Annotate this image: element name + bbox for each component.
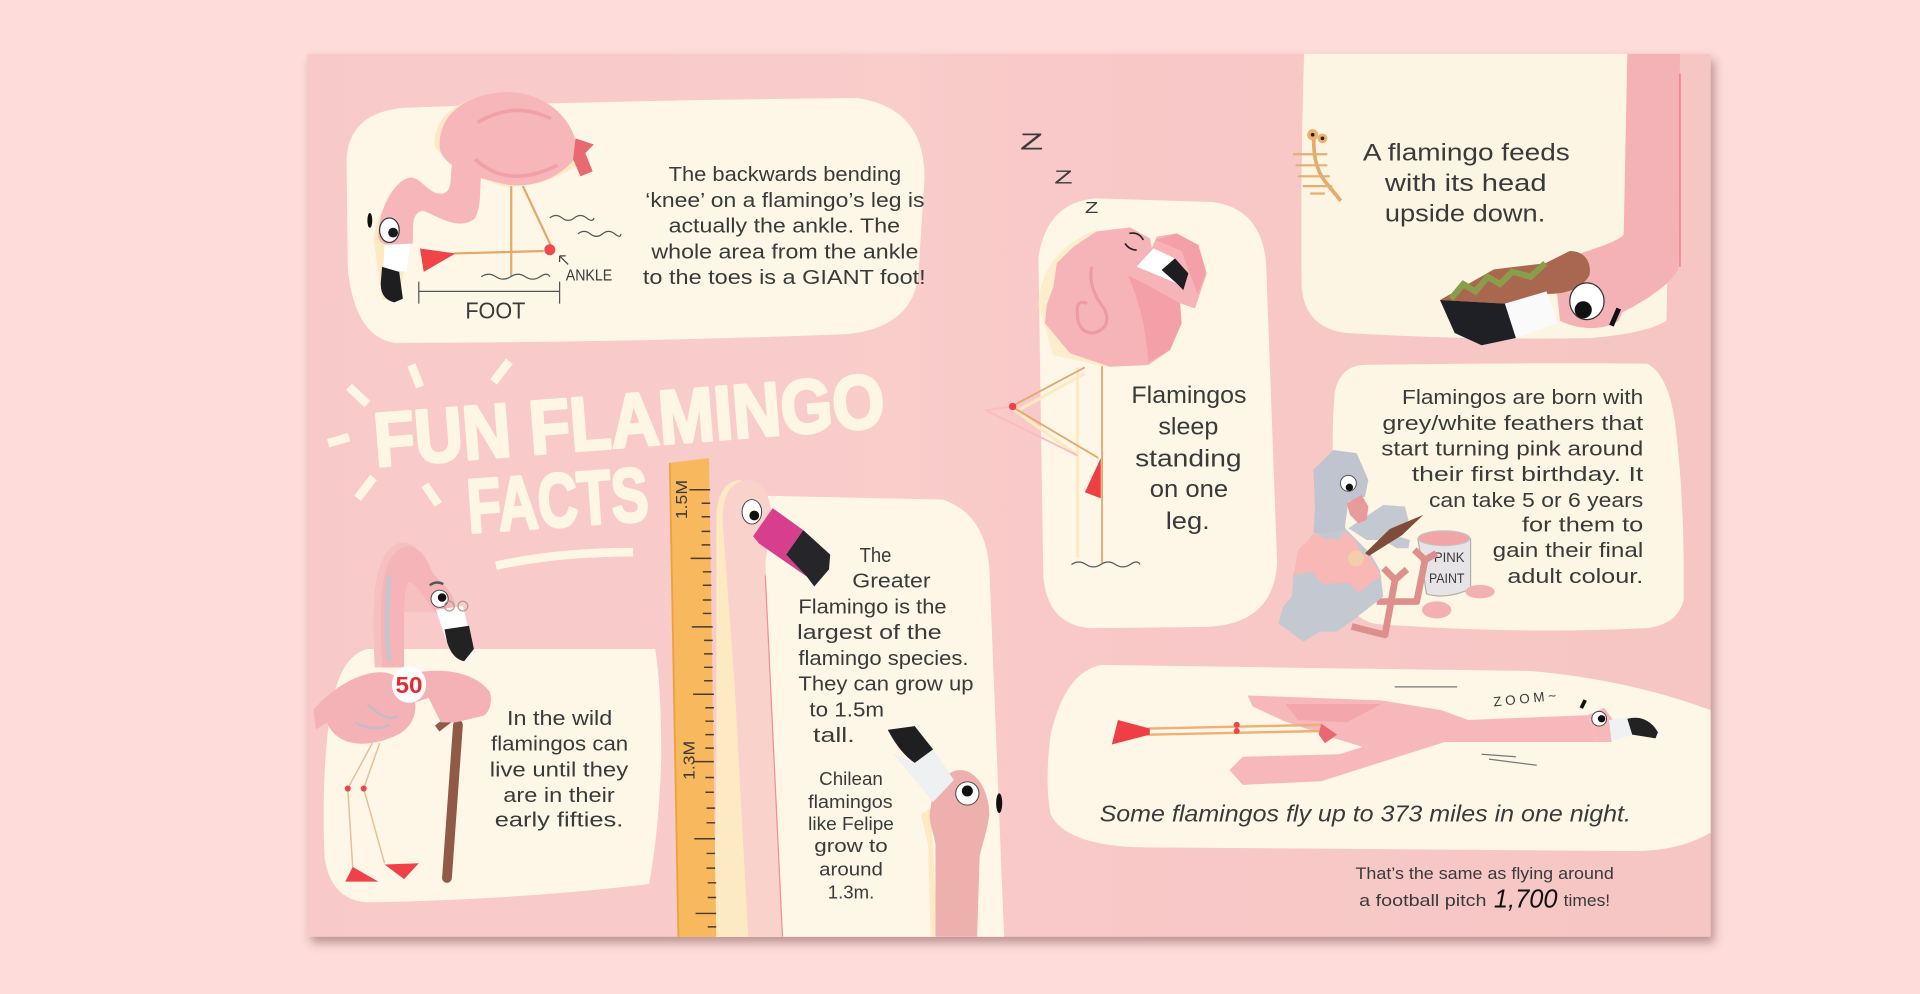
text: colour: Flamingos are born with [1402,387,1643,409]
paint brush [1365,515,1423,556]
text: sleeping [1131,382,1247,535]
text: greater flamingo: largest of the [797,622,942,644]
sleeping Zs: Z [1054,167,1073,188]
ruler: 1.3M [681,741,698,780]
panel: ankle fact [347,92,926,343]
footnote: football pitch: 1,700 [1494,885,1558,913]
text: ankle fact: ‘knee’ on a flamingo’s leg is [645,190,924,212]
paint can [1418,531,1495,618]
old flamingo [313,542,491,882]
text: colour: for them to [1522,514,1643,536]
text: colour: can take 5 or 6 years [1429,490,1643,512]
label: ankle: ANKLE [566,267,612,284]
footnote: football pitch [1355,864,1614,913]
text: chilean flamingo: 1.3m. [828,882,874,903]
footnote: football pitch: times! [1564,891,1610,910]
zoom label: ZOOM~ [1493,688,1560,709]
panel: sleeping fact [986,198,1277,628]
sleeping Zs: Z [1020,128,1043,154]
ruler [670,458,716,937]
panel: feeding fact [1293,54,1680,345]
text: greater flamingo: to 1.5m [809,699,884,721]
greater flamingo [716,480,830,937]
text: ankle fact: whole area from the ankle [650,241,918,263]
footnote: football pitch: That’s the same as flying around [1355,864,1614,883]
text: lifespan: In the wild [507,708,612,730]
sleeping Zs [1020,128,1099,217]
title: fun flamingo facts: FACTS [464,452,651,550]
text: ankle fact: The backwards bending [669,164,901,186]
text: colour: adult colour. [1507,566,1643,588]
text: greater flamingo: The [860,545,891,567]
text: greater flamingo: They can grow up [798,674,973,696]
text: greater flamingo: Greater [852,571,931,593]
text: lifespan [490,708,629,831]
text: greater flamingo [797,545,973,747]
text: feeding: A flamingo feeds [1363,139,1570,166]
text: sleeping: on one [1150,476,1228,503]
text: chilean flamingo: grow to [814,835,888,856]
caption: flying: Some flamingos fly up to 373 miles in one night. [1100,801,1631,827]
panel: lifespan fact [313,542,661,902]
text: ankle fact [643,164,926,289]
panel: flying fact [1048,665,1711,851]
text: colour: start turning pink around [1381,438,1643,460]
title underline [496,552,633,566]
chilean flamingo [888,726,1002,937]
label: ankle [560,256,612,284]
walking cane [447,725,458,878]
text: sleeping: standing [1135,446,1242,473]
book spread [307,54,1711,937]
text: chilean flamingo: around [819,858,883,879]
age badge [392,666,426,703]
paint can: PINK [1434,550,1464,565]
brine shrimp [1293,129,1341,201]
ripple [1071,562,1140,567]
text: colour [1381,387,1644,588]
text: ankle fact: to the toes is a GIANT foot! [643,267,926,289]
text: lifespan: live until they [490,759,629,781]
text: feeding: with its head [1384,170,1547,197]
flamingo bending down [367,92,594,302]
water ripples [481,216,621,279]
speed lines [1395,687,1537,765]
text: greater flamingo: tall. [813,725,855,747]
text: ankle fact: actually the ankle. The [669,216,900,238]
text: chilean flamingo: Chilean [819,768,883,789]
text: lifespan: early fifties. [495,809,623,831]
ruler: 1.5M [674,480,691,519]
title: fun flamingo facts [328,359,888,566]
text: feeding: upside down. [1385,201,1545,228]
text: chilean flamingo: flamingos [808,791,893,812]
text: lifespan: are in their [503,785,615,807]
text: sleeping: sleep [1158,414,1218,441]
text: chilean flamingo: like Felipe [808,813,894,834]
grey chick painting [1278,450,1436,642]
burst rays [328,361,509,504]
text: colour: their first birthday. It [1412,464,1644,486]
text: greater flamingo: Flamingo is the [798,596,947,618]
sleeping flamingo [986,227,1207,563]
text: colour: gain their final [1493,540,1643,562]
title: fun flamingo facts: FUN FLAMINGO [371,359,888,483]
sleeping Zs: Z [1085,200,1099,217]
text: lifespan: flamingos can [491,734,628,756]
upside-down flamingo [1440,54,1680,345]
label: foot [419,282,560,323]
flying flamingo [1112,695,1658,785]
text: feeding [1363,139,1570,228]
text: colour: grey/white feathers that [1382,413,1644,435]
panel: colour fact [1278,363,1684,642]
text: sleeping: Flamingos [1131,382,1247,409]
panel: height fact [670,458,1004,937]
label: foot: FOOT [465,297,525,323]
footnote: football pitch: a football pitch [1359,891,1487,910]
text: chilean flamingo [808,768,894,903]
paint can: PAINT [1429,571,1464,586]
age badge: 50 [396,672,422,698]
text: sleeping: leg. [1166,508,1210,535]
text: greater flamingo: flamingo species. [798,648,969,670]
